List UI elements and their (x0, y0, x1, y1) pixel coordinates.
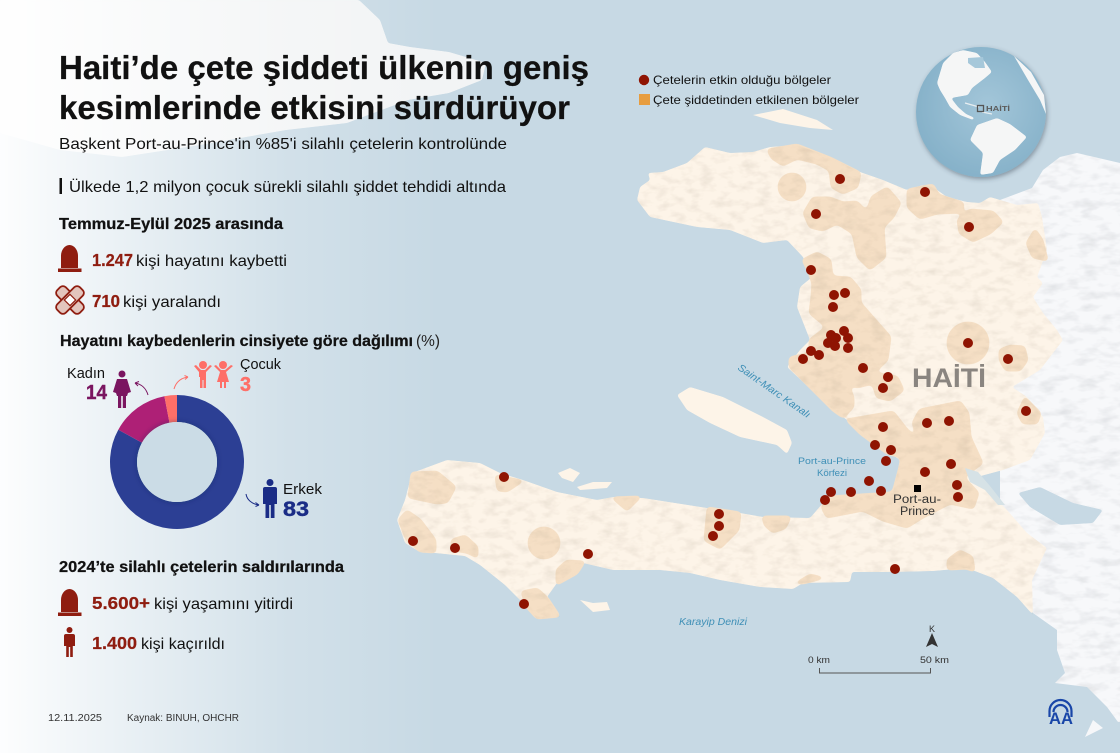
label: Kadın 14: 14 (86, 382, 108, 404)
north arrow (926, 624, 938, 647)
label: Erkek 83: 83 (283, 498, 309, 521)
title: kesimlerinde etkisini sürdürüyor (59, 89, 570, 126)
Lake Azuei (965, 468, 1005, 505)
land: Cuba (0, 0, 486, 157)
stat: kidnapped: kişi kaçırıldı (141, 636, 225, 653)
stat: deaths: kişi hayatını kaybetti (136, 253, 287, 270)
footer: date and source (48, 713, 239, 724)
icon: kidnapped person (64, 627, 75, 657)
stat: 2024 deaths: kişi yaşamını yitirdi (154, 596, 293, 613)
heading: 2024 attacks: 2024’te silahlı çetelerin saldırılarında (59, 559, 344, 576)
segment: women 14 (118, 396, 170, 443)
label: Kadın 14 (67, 366, 108, 404)
map label: Karayip Denizi: Karayip Denizi (679, 617, 748, 628)
legend: Çete şiddetinden etkilenen bölgeler (653, 93, 859, 107)
scale bar: 0 km (808, 655, 830, 666)
heading: July-September 2025: Temmuz-Eylül 2025 arasında (59, 216, 283, 233)
donut hole (137, 422, 217, 502)
arrow: to children (174, 376, 188, 389)
stat: wounded: 710 (92, 291, 120, 311)
heading: gender distribution: (%) (416, 333, 440, 350)
label: Çocuk 3 (240, 357, 282, 396)
stat: deaths (92, 250, 287, 270)
Haiti terrain texture (390, 140, 1070, 630)
map label: Haiti: HAİTİ (912, 363, 986, 393)
land: Dominican Republic (1000, 153, 1120, 722)
map label: Port-au-Prince Körfezi: Körfezi (817, 468, 847, 479)
north arrow: K (929, 624, 935, 634)
capital marker: Port-au-Prince: Prince (900, 506, 935, 518)
label: Çocuk 3: Çocuk (240, 357, 282, 373)
map label: Port-au-Prince Körfezi: Port-au-Prince (798, 456, 866, 467)
capital marker: Port-au-Prince (893, 485, 941, 518)
icon: bandage (54, 284, 86, 316)
label: Erkek 83: Erkek (283, 482, 323, 498)
map label: Port-au-Prince Körfezi (798, 456, 866, 479)
subtitle: Başkent Port-au-Prince'in %85'i silahlı çetelerin kontrolünde (59, 136, 507, 153)
locator globe: HAİTİ (986, 104, 1010, 113)
map label: Saint-Marc Kanalı: Saint-Marc Kanalı (735, 362, 812, 421)
island: Tortue (753, 109, 833, 130)
icon: woman (113, 370, 131, 408)
left panel fade (0, 0, 440, 753)
legend (639, 73, 859, 107)
arrow: to woman (135, 382, 148, 395)
stat: 2024 deaths (92, 593, 293, 613)
icon: children (194, 361, 233, 388)
arrow: to man (246, 494, 259, 506)
stat: kidnapped (92, 633, 225, 653)
lake: Enriquillo (1018, 487, 1103, 525)
DR terrain texture (1000, 154, 1120, 722)
footer: date and source: Kaynak: BINUH, OHCHR (127, 713, 239, 724)
donut chart (110, 395, 244, 529)
title (59, 49, 589, 126)
stat: 2024 deaths: 5.600+ (92, 593, 150, 613)
island: Gonâve (677, 387, 792, 454)
AA logo (1049, 700, 1073, 728)
segment: children 3 (164, 395, 177, 423)
icon: tombstone (58, 245, 82, 272)
small southern islands (558, 468, 1103, 737)
AA logo: AA (1049, 709, 1073, 728)
footer: date and source: 12.11.2025 (48, 713, 102, 724)
scale bar: 50 km (920, 655, 949, 666)
heading: gender distribution: Hayatını kaybedenlerin cinsiyete göre dağılımı (60, 333, 413, 350)
label: Çocuk 3: 3 (240, 374, 251, 396)
stat: kidnapped: 1.400 (92, 633, 137, 653)
legend: Çetelerin etkin olduğu bölgeler (653, 73, 831, 87)
label: Erkek 83 (283, 482, 323, 521)
scale bar (808, 655, 949, 673)
stat: deaths: 1.247 (92, 250, 133, 270)
stat: wounded: kişi yaralandı (123, 294, 221, 311)
segment: men 83 (110, 395, 244, 529)
label: Kadın 14: Kadın (67, 366, 105, 382)
child threat callout: Ülkede 1,2 milyon çocuk sürekli silahlı şiddet tehdidi altında (69, 178, 506, 196)
capital marker: Port-au-Prince: Port-au- (893, 494, 941, 506)
gang active area dots (408, 174, 1031, 609)
title: Haiti’de çete şiddeti ülkenin geniş (59, 49, 589, 86)
locator globe (916, 47, 1046, 177)
icon: tombstone (58, 589, 82, 616)
gang violence affected zones (399, 145, 1047, 618)
icon: man (263, 479, 277, 518)
stat: wounded (92, 291, 221, 311)
land: Haiti mainland (397, 145, 1063, 619)
